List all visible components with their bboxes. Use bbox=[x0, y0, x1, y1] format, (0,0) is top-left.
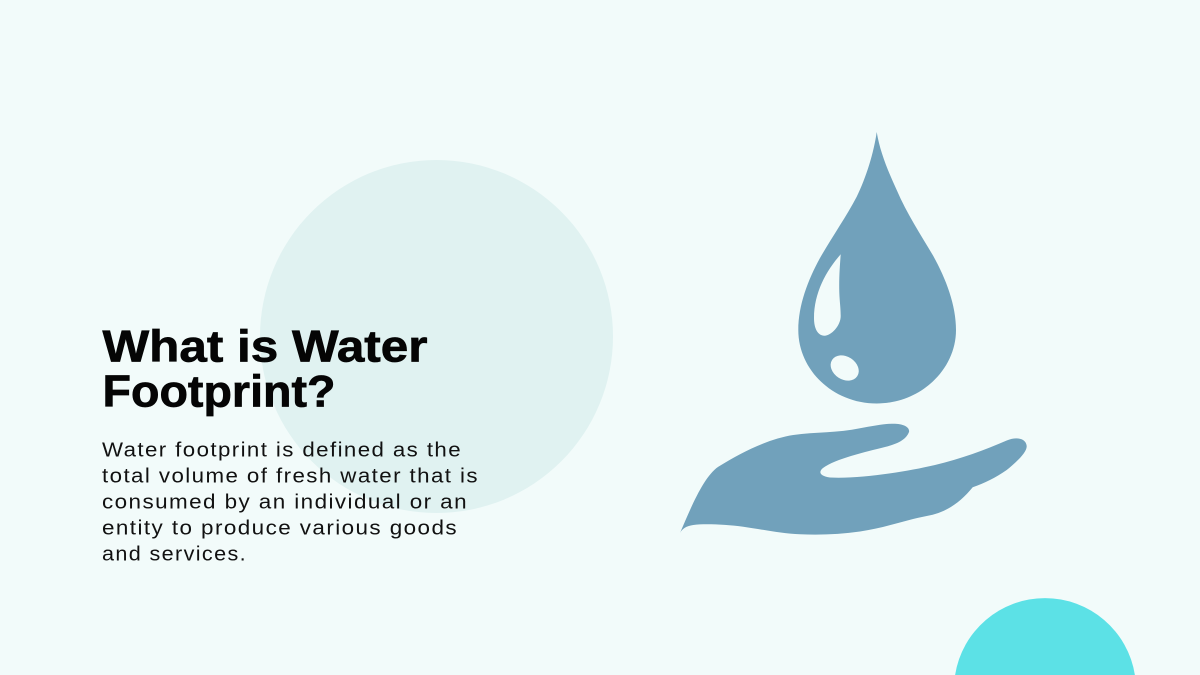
drop highlight: oval bbox=[826, 350, 864, 386]
drop highlight: long bbox=[814, 254, 841, 336]
title: Footprint? bbox=[102, 368, 336, 416]
large pale circle behind text bbox=[260, 160, 613, 513]
description text bbox=[102, 438, 479, 566]
description text: entity to produce various goods bbox=[102, 516, 458, 540]
description text: total volume of fresh water that is bbox=[102, 464, 479, 488]
title: What is Water bbox=[102, 322, 428, 372]
description text: consumed by an individual or an bbox=[102, 490, 468, 514]
description text: and services. bbox=[102, 542, 247, 566]
icon: open hand bbox=[680, 424, 1027, 535]
icon: water drop bbox=[798, 132, 956, 404]
title bbox=[102, 322, 428, 416]
cyan circle at bottom right bbox=[955, 598, 1135, 675]
description text: Water footprint is defined as the bbox=[102, 438, 462, 462]
icon: water drop over hand bbox=[680, 132, 1027, 535]
